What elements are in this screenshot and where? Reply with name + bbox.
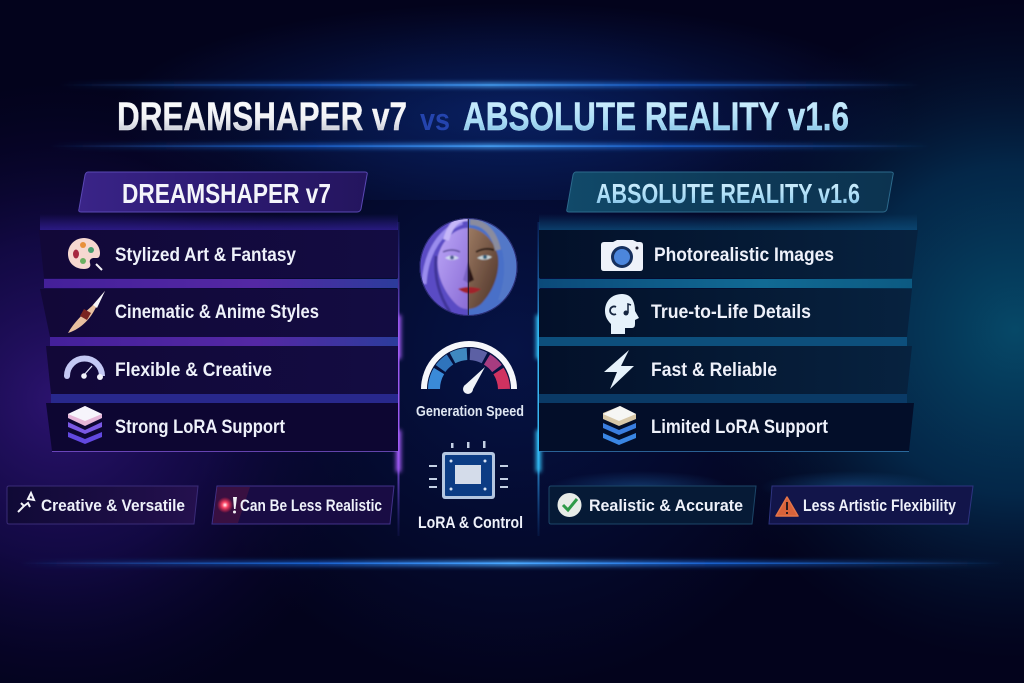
- title: Absolute Reality v1.6: ABSOLUTE REALITY v1.6: [463, 95, 849, 139]
- row: Fast & Reliable: [539, 346, 912, 394]
- right hair: [488, 224, 516, 299]
- panel: Absolute Reality v1.6 features: [539, 172, 973, 524]
- gauge: generation speed: [416, 344, 524, 420]
- row: Strong LoRA Support: [46, 403, 398, 451]
- eyes and brows: [445, 256, 459, 260]
- title band: [50, 83, 930, 148]
- row: Cinematic & Anime Styles: [40, 289, 398, 337]
- row: True-to-Life Details: [539, 289, 912, 337]
- right header: [567, 172, 893, 212]
- icon: blue layers: [603, 406, 636, 445]
- nose shadow and lips: [463, 264, 468, 282]
- pill: Less Artistic Flexibility: Less Artistic Flexibility: [803, 496, 956, 515]
- row: Cinematic & Anime Styles: Cinematic & Anime Styles: [115, 302, 319, 323]
- row: Photorealistic Images: [539, 230, 918, 278]
- panel: DreamShaper v7 features: [7, 172, 398, 524]
- left hair strands: [424, 222, 462, 284]
- pill: Creative & Versatile: Creative & Versatile: [41, 496, 185, 515]
- divider lines of centre column: [396, 222, 541, 536]
- row: Limited LoRA Support: Limited LoRA Support: [651, 417, 829, 438]
- pill: Less Artistic Flexibility: [769, 486, 973, 524]
- row: Stylized Art & Fantasy: [39, 230, 398, 278]
- icon: purple layers: [68, 406, 102, 444]
- bottom glow line: [20, 561, 1004, 566]
- pill: Realistic & Accurate: [549, 486, 756, 524]
- row: Strong LoRA Support: Strong LoRA Support: [115, 417, 286, 438]
- pill: Can Be Less Realistic: Can Be Less Realistic: [240, 496, 382, 515]
- row: Stylized Art & Fantasy: Stylized Art & Fantasy: [115, 245, 296, 266]
- right skin: [468, 228, 498, 309]
- label: LoRA & Control: LoRA & Control: [418, 513, 523, 532]
- title: vs: vs: [420, 102, 450, 137]
- row: Flexible & Creative: Flexible & Creative: [115, 360, 272, 381]
- row: Photorealistic Images: Photorealistic Images: [654, 245, 834, 266]
- left header: [79, 172, 367, 212]
- left header: DREAMSHAPER v7: [122, 178, 331, 209]
- pill: Creative & Versatile: [7, 486, 198, 524]
- pill: Can Be Less Realistic: [212, 486, 394, 524]
- title: DreamShaper v7: DREAMSHAPER v7: [117, 95, 407, 139]
- label: Generation Speed: Generation Speed: [416, 403, 524, 420]
- chip: LoRA & control: [418, 441, 523, 532]
- icon: small gauge: [64, 359, 103, 380]
- pill: Realistic & Accurate: Realistic & Accurate: [589, 496, 743, 515]
- row: True-to-Life Details: True-to-Life Details: [651, 302, 811, 323]
- left skin: [438, 228, 468, 309]
- icon: head profile: [605, 294, 639, 334]
- right header: ABSOLUTE REALITY v1.6: [596, 178, 860, 209]
- icon: camera: [601, 240, 643, 271]
- icon: paintbrush: [68, 291, 105, 333]
- row: Limited LoRA Support: [539, 403, 914, 451]
- icon: lightning bolt: [604, 350, 634, 389]
- row: Fast & Reliable: Fast & Reliable: [651, 360, 777, 381]
- portrait: split face: [420, 218, 518, 316]
- row: Flexible & Creative: [46, 346, 398, 394]
- icon: palette: [68, 238, 102, 270]
